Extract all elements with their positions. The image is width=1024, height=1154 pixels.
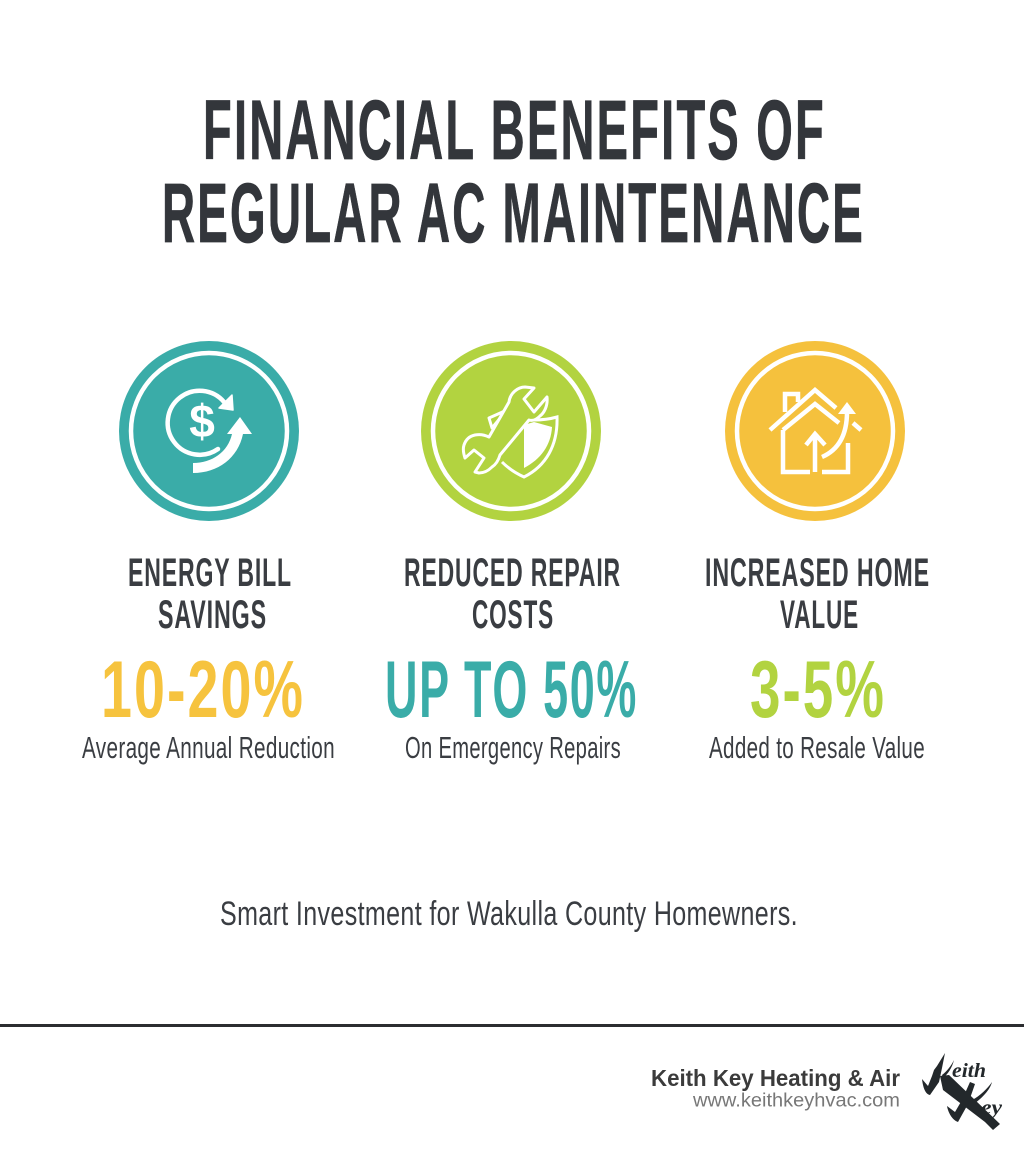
stat: 3-5%: 3-5%	[750, 645, 886, 735]
heading: increased home value: VALUE	[780, 593, 859, 637]
footer: company name and website	[651, 1065, 900, 1112]
panel: energy bill savings	[82, 341, 335, 765]
heading: increased home value	[705, 551, 930, 637]
logo: Keith Key: ey	[981, 1097, 1002, 1119]
icon: wrench and shield	[421, 341, 601, 521]
title	[162, 83, 865, 260]
icon: dollar savings	[119, 341, 299, 521]
heading: reduced repair costs	[404, 551, 621, 637]
stat: up to 50%: UP TO 50%	[385, 645, 638, 735]
logo: Keith Key	[922, 1053, 1002, 1130]
footer: company name and website: www.keithkeyhvac.com	[692, 1090, 900, 1112]
heading: reduced repair costs: COSTS	[472, 593, 554, 637]
icon: dollar savings: $	[189, 395, 215, 447]
heading: energy bill savings: ENERGY BILL	[128, 551, 292, 595]
heading: energy bill savings: SAVINGS	[158, 593, 267, 637]
panel: reduced repair costs	[385, 341, 638, 765]
icon: house with rising arrows	[725, 341, 905, 521]
footer: company name and website: Keith Key Heating & Air	[651, 1065, 900, 1091]
caption: average annual reduction: Average Annual Reduction	[82, 730, 335, 765]
heading: energy bill savings	[128, 551, 292, 637]
logo: Keith Key: eith	[952, 1060, 986, 1082]
stat: 10-20%: 10-20%	[101, 645, 305, 735]
heading: reduced repair costs: REDUCED REPAIR	[404, 551, 621, 595]
panel: increased home value	[705, 341, 930, 765]
caption: on emergency repairs: On Emergency Repairs	[405, 730, 621, 765]
tagline: Smart Investment for Wakulla County Homewners.	[220, 895, 798, 933]
